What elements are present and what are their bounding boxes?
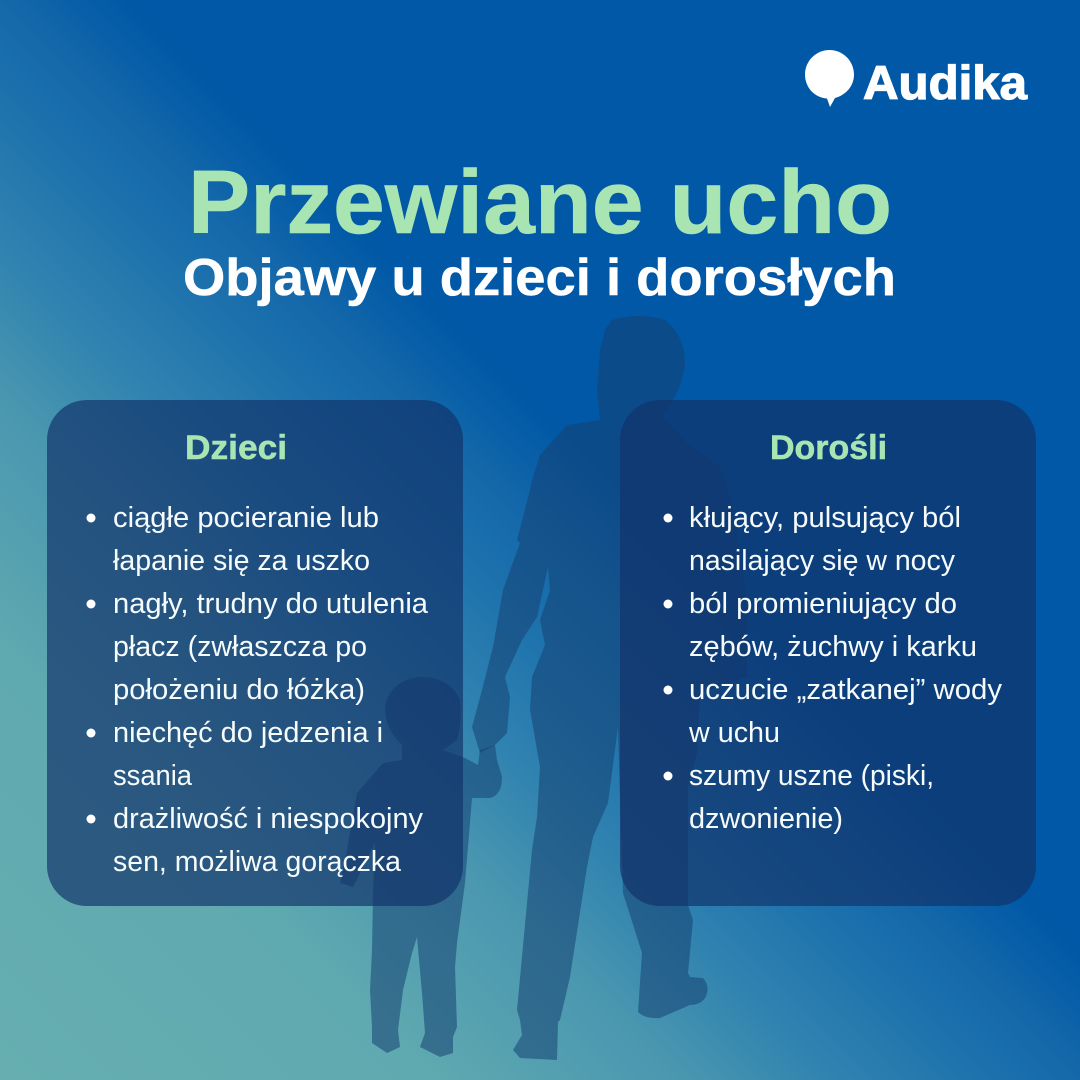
list: adults' symptoms xyxy=(664,502,1003,835)
list: children's symptoms: ssania xyxy=(113,760,192,792)
silhouette: adult xyxy=(472,316,747,1060)
list: children's symptoms: sen, możliwa gorączka xyxy=(113,846,401,878)
logo: Audika xyxy=(805,50,1028,109)
title: Przewiane ucho xyxy=(188,153,892,253)
list: children's symptoms: drażliwość i niespokojny xyxy=(113,803,424,835)
silhouette: child xyxy=(340,677,502,1057)
list: adults' symptoms: szumy uszne (piski, xyxy=(689,760,934,792)
list: adults' symptoms: nasilający się w nocy xyxy=(689,545,956,577)
subtitle: Objawy u dzieci i dorosłych xyxy=(183,249,896,307)
panel: Dorośli background xyxy=(620,400,1036,906)
icon: speech bubble xyxy=(805,50,854,107)
list: adults' symptoms: zębów, żuchwy i karku xyxy=(689,631,977,663)
list: children's symptoms: niechęć do jedzenia i xyxy=(113,717,383,749)
list: adults' symptoms: w uchu xyxy=(688,717,780,749)
list: children's symptoms: ciągłe pocieranie lub xyxy=(113,502,379,534)
logo wordmark: Audika xyxy=(863,56,1028,109)
list: adults' symptoms: dzwonienie) xyxy=(689,803,843,835)
list: adults' symptoms: kłujący, pulsujący ból xyxy=(689,502,961,534)
list: children's symptoms: łapanie się za uszko xyxy=(113,545,370,577)
list: children's symptoms: płacz (zwłaszcza po xyxy=(113,631,367,663)
list: children's symptoms: położeniu do łóżka) xyxy=(113,674,365,706)
heading: Dorośli: Dorośli xyxy=(770,429,887,467)
list: children's symptoms: nagły, trudny do utulenia xyxy=(113,588,428,620)
list: children's symptoms xyxy=(86,502,428,878)
list: adults' symptoms: uczucie „zatkanej” wody xyxy=(689,674,1003,706)
panel: Dzieci background xyxy=(47,400,463,906)
list: adults' symptoms: ból promieniujący do xyxy=(689,588,957,620)
heading: Dzieci: Dzieci xyxy=(185,429,287,467)
